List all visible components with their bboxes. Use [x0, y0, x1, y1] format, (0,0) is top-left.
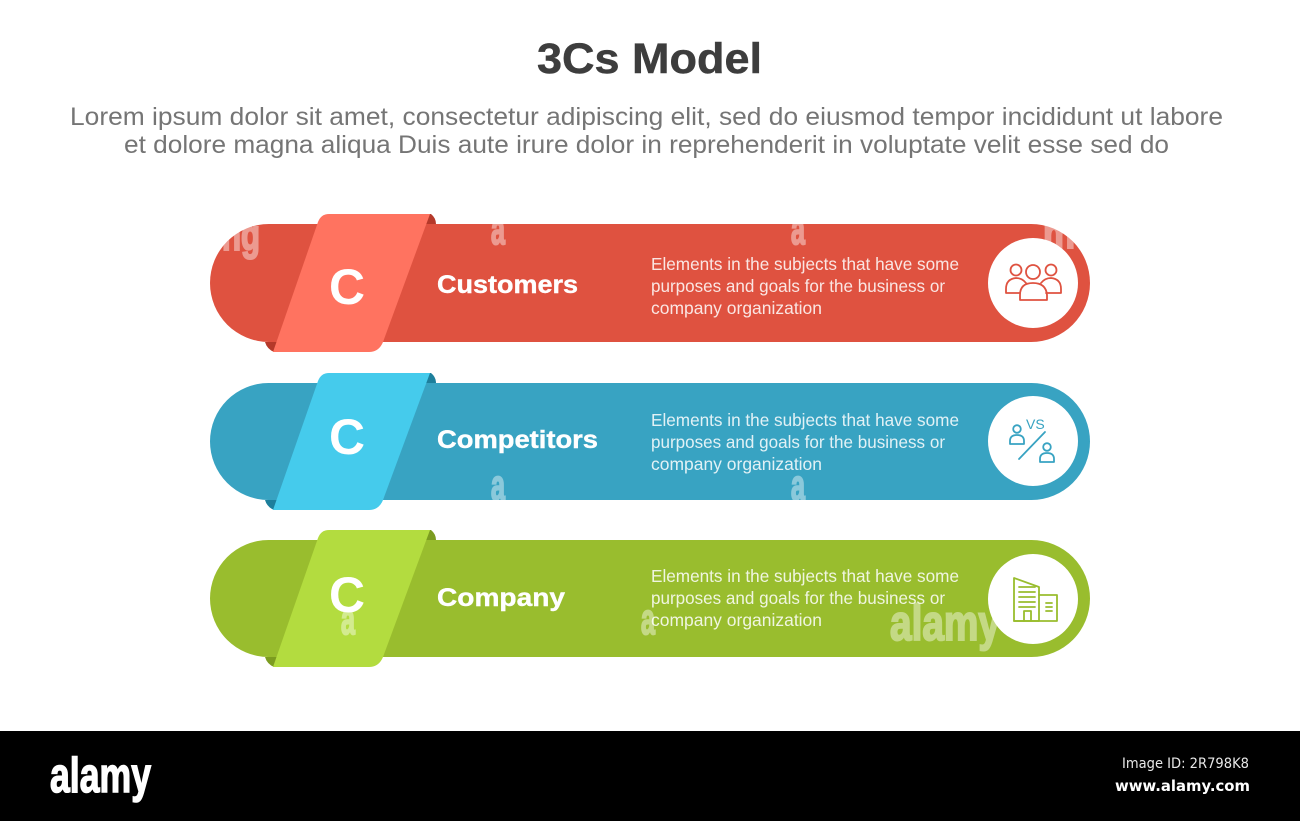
- company icon circle: [988, 554, 1078, 644]
- customers description: [651, 254, 959, 318]
- company description: Elements in the subjects that have some: [651, 566, 959, 586]
- company description: [651, 566, 959, 630]
- intro text: et dolore magna aliqua Duis aute irure dolor in reprehenderit in voluptate velit esse sed do: [124, 131, 1169, 159]
- customers ribbon: [273, 214, 430, 352]
- competitors ribbon fold: [265, 373, 436, 510]
- watermarks: m: [1043, 209, 1075, 258]
- panel: company: [210, 530, 1090, 667]
- customers bar: [210, 224, 1090, 342]
- competitors label: Competitors: [437, 426, 598, 454]
- title: 3Cs Model: [537, 35, 762, 83]
- company description: company organization: [651, 610, 822, 630]
- panel: customers: [210, 214, 1090, 352]
- customers ribbon fold: [265, 214, 436, 352]
- company ribbon fold: [265, 530, 436, 667]
- watermarks: [222, 205, 1075, 651]
- customers icon circle: [988, 238, 1078, 328]
- image id: Image ID: 2R798K8: [1122, 756, 1249, 772]
- company bar: [210, 540, 1090, 657]
- customers description: purposes and goals for the business or: [651, 276, 945, 296]
- competitors letter: C: [329, 409, 365, 465]
- customers letter: C: [329, 259, 365, 315]
- footer logo: alamy: [50, 749, 151, 803]
- competitors description: purposes and goals for the business or: [651, 432, 945, 452]
- customers description: Elements in the subjects that have some: [651, 254, 959, 274]
- website: www.alamy.com: [1115, 777, 1250, 795]
- customers label: Customers: [437, 271, 578, 299]
- panel: competitors: [210, 373, 1090, 510]
- watermarks: a: [791, 205, 805, 254]
- competitors description: Elements in the subjects that have some: [651, 410, 959, 430]
- icon: people: [1006, 264, 1061, 300]
- intro text: [70, 103, 1223, 159]
- competitors description: [651, 410, 959, 474]
- company letter: C: [329, 567, 365, 623]
- customers description: company organization: [651, 298, 822, 318]
- competitors ribbon: [273, 373, 430, 510]
- watermarks: a: [491, 205, 505, 254]
- company description: purposes and goals for the business or: [651, 588, 945, 608]
- intro text: Lorem ipsum dolor sit amet, consectetur adipiscing elit, sed do eiusmod tempor incididunt ut labore: [70, 103, 1223, 131]
- competitors bar: [210, 383, 1090, 500]
- watermarks: ng: [222, 211, 260, 260]
- watermarks: a: [791, 461, 805, 510]
- watermarks: a: [341, 595, 355, 644]
- footer band: [0, 731, 1300, 821]
- icon: versus: VS: [1026, 416, 1045, 432]
- icon: buildings: [1014, 578, 1057, 621]
- watermarks: a: [491, 461, 505, 510]
- watermarks: a: [641, 595, 655, 644]
- watermarks: alamy: [890, 595, 1000, 651]
- company label: Company: [437, 584, 565, 612]
- competitors description: company organization: [651, 454, 822, 474]
- competitors icon circle: [988, 396, 1078, 486]
- company ribbon: [273, 530, 430, 667]
- icon: versus: [1010, 416, 1054, 462]
